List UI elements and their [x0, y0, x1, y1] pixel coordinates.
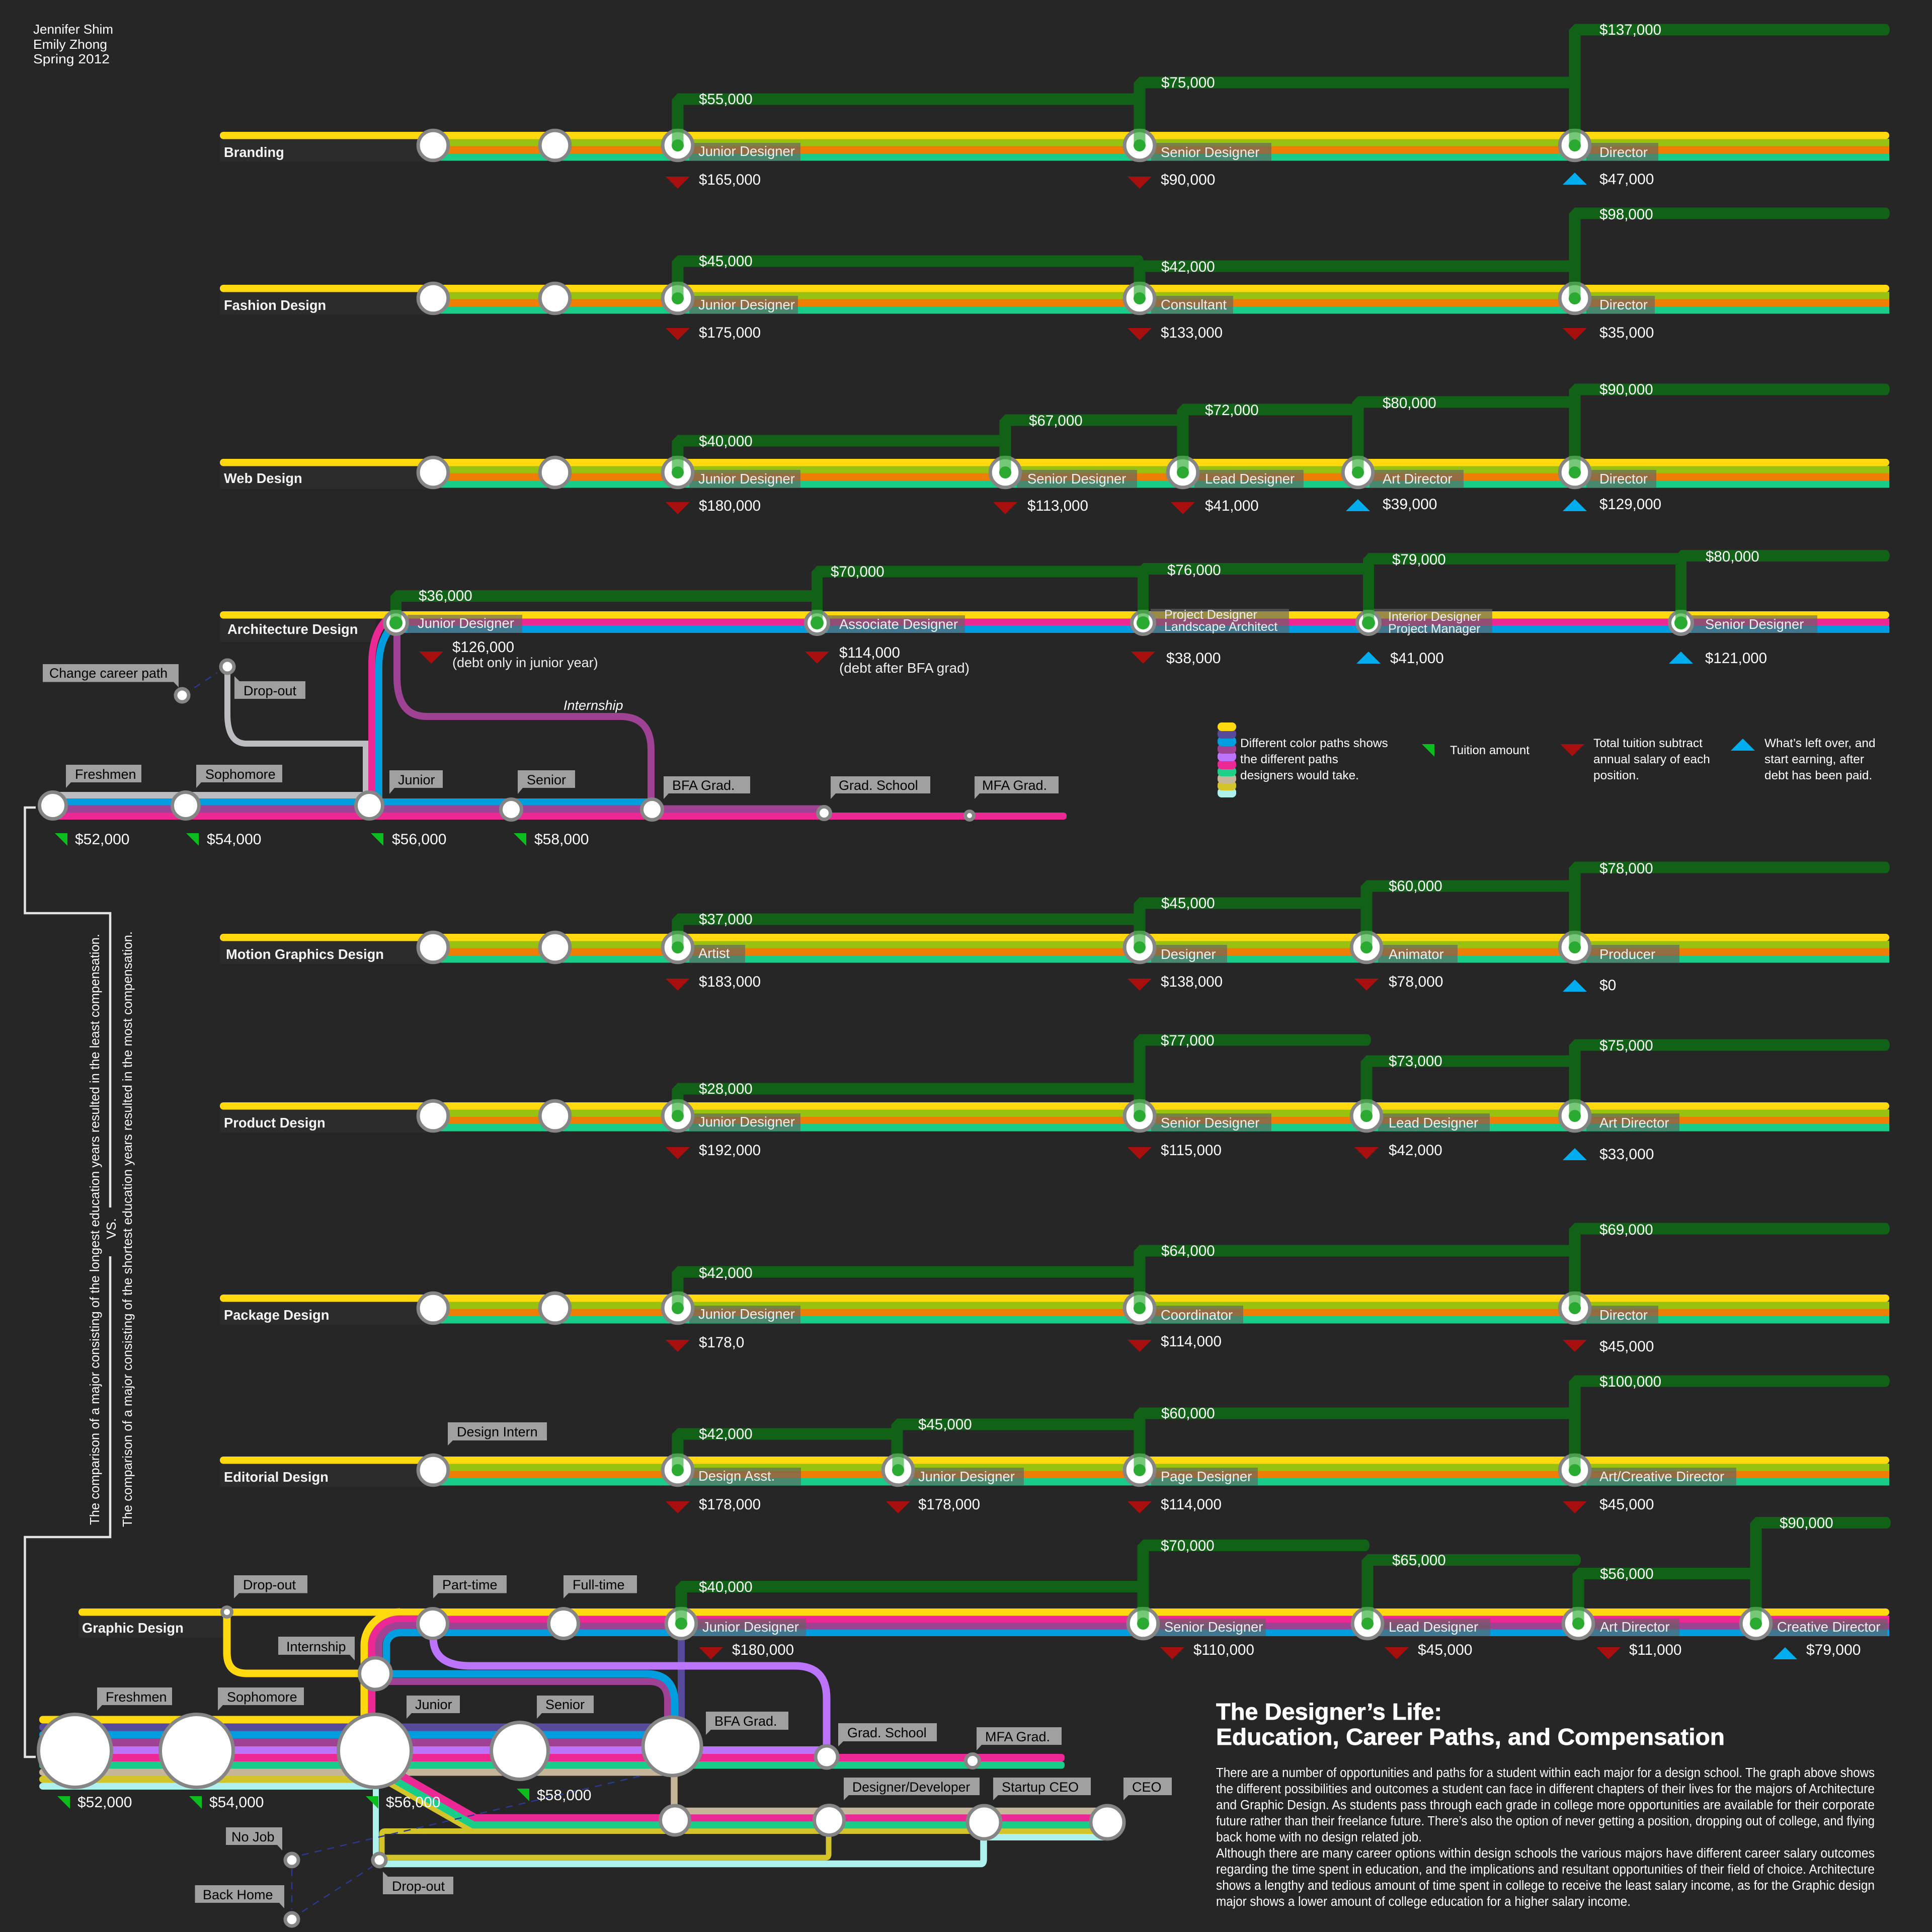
Graphic tuition amounts: $54,000 [209, 1794, 264, 1811]
Package stop: Director: $45,000 [1599, 1338, 1654, 1355]
Branding stop: Director: $137,000 [1599, 22, 1661, 38]
Architecture stop: Junior Designer: $36,000 [419, 588, 472, 604]
Editorial stop: Junior Designer [883, 1416, 1144, 1513]
Branding stop: Director: $47,000 [1599, 171, 1654, 188]
title: The Designer’s Life: [1216, 1699, 1442, 1725]
legend: total tuition: annual salary of each [1593, 753, 1710, 766]
callout: Change career path [43, 664, 179, 687]
Web stop: Art Director: Art Director [1383, 471, 1452, 487]
Graphic school tracks [39, 1716, 1065, 1790]
Product stop: Junior Designer: $28,000 [699, 1081, 753, 1097]
callout: Freshmen: Freshmen [75, 767, 136, 782]
Architecture dropout and change career nodes [176, 660, 234, 702]
Editorial tracks and name: Editorial Design [224, 1469, 329, 1485]
callout: Full-time [564, 1575, 637, 1598]
callout: Junior (Graphic): Junior [415, 1697, 452, 1712]
callout: CEO: CEO [1132, 1780, 1162, 1795]
comparison note: longest education: The comparison of a major consisting of the longest education years resulted in the least compensation. [87, 934, 102, 1525]
legend: paths text: the different paths [1240, 753, 1338, 766]
Fashion tracks and name: Fashion Design [224, 297, 326, 313]
Product tracks and name: Product Design [224, 1115, 326, 1131]
Editorial stop: Art/Creative Director [1560, 1374, 1890, 1513]
Product stop: Junior Designer: Junior Designer [698, 1114, 795, 1130]
Architecture branch lines from school to career [227, 620, 651, 810]
callout: Senior (Graphic): Senior [545, 1697, 585, 1712]
Architecture stop: Senior Designer: $80,000 [1706, 548, 1759, 565]
callout: Internship (Graphic) [278, 1637, 355, 1660]
Architecture upper tracks and name [220, 611, 1889, 642]
Architecture stop: Associate Designer [805, 564, 1147, 676]
row: Package Design [220, 1222, 1890, 1355]
Fashion stop: Junior Designer: Junior Designer [698, 297, 795, 312]
callout: Drop-out (lower): Drop-out [392, 1879, 445, 1894]
Product stop: Lead Designer: $73,000 [1389, 1053, 1442, 1070]
Product stop: Junior Designer: $192,000 [699, 1142, 761, 1159]
Product stop: Junior Designer [663, 1081, 1144, 1159]
callout: Senior [518, 770, 575, 794]
Graphic stop: Creative Director: $79,000 [1806, 1642, 1861, 1658]
callout: Sophomore: Sophomore [205, 767, 276, 782]
Graphic stop: Creative Director: $90,000 [1780, 1515, 1833, 1532]
Architecture italic note: Internship: Internship [564, 698, 623, 713]
Web stop: Art Director: $80,000 [1383, 395, 1436, 412]
Package stop: Director: Director [1599, 1307, 1648, 1323]
Fashion stop: Director [1560, 206, 1890, 341]
callout: BFA Grad.: BFA Grad. [672, 778, 735, 793]
callout: No Job [226, 1827, 282, 1850]
Graphic stop: Lead Designer: $65,000 [1392, 1552, 1446, 1569]
callout: Part-time [433, 1575, 507, 1598]
Architecture tuition amounts [55, 831, 589, 848]
Branding tracks and name [220, 130, 1889, 162]
callout: Back Home: Back Home [203, 1887, 273, 1902]
callout: MFA Grad. (Graphic) [977, 1727, 1062, 1750]
Web tracks and name [220, 457, 1889, 489]
description text: regarding the time spent in education, and the implications and resultant opportunities of their field of choice. Architecture [1216, 1863, 1875, 1877]
callout: Change career path: Change career path [49, 666, 168, 681]
Fashion stop: Junior Designer [663, 253, 1144, 341]
Branding stop: Junior Designer: $165,000 [699, 172, 761, 188]
Package tracks and name: Package Design [224, 1307, 329, 1323]
description text: and Graphic Design. As students pass through each grade in college more opportunities are available for their corporate [1216, 1798, 1875, 1812]
row: Graphic Design [38, 1515, 1891, 1926]
row: Fashion Design [220, 206, 1890, 341]
Web tracks and name: Web Design [224, 470, 302, 486]
Architecture tuition amounts: $52,000 [75, 831, 129, 848]
callout: Grad. School (Graphic): Grad. School [847, 1725, 927, 1740]
Editorial stop: Page Designer: Page Designer [1161, 1469, 1252, 1484]
callout: Internship (Graphic): Internship [286, 1639, 346, 1654]
Product stop: Lead Designer: Lead Designer [1389, 1115, 1478, 1131]
Web stop: Lead Designer: $41,000 [1205, 498, 1259, 514]
Motion stop: Artist: $183,000 [699, 974, 761, 990]
Graphic dashed links [292, 1776, 642, 1912]
Web stop: Director [1560, 381, 1890, 513]
Fashion stop: Consultant: Consultant [1161, 297, 1227, 312]
Branding stop: Junior Designer: $55,000 [699, 91, 753, 108]
Editorial stop: Art/Creative Director: Art/Creative Director [1599, 1469, 1724, 1484]
callout: Sophomore [196, 765, 282, 788]
Architecture stop: Senior Designer [1669, 548, 1890, 667]
Product stop: Senior Designer: $115,000 [1161, 1142, 1222, 1159]
Web stop: Junior Designer: $40,000 [699, 433, 753, 450]
Package stop: Coordinator [1124, 1243, 1579, 1352]
Branding stop: Director: Director [1599, 144, 1648, 160]
Product stop: Senior Designer: $77,000 [1161, 1032, 1215, 1049]
Architecture stop: Project Designer / Landscape Architect [1131, 562, 1373, 667]
Editorial stop: Page Designer [1124, 1405, 1579, 1513]
Package stop: Coordinator: Coordinator [1161, 1307, 1233, 1323]
Editorial stop: Page Designer: $114,000 [1161, 1496, 1222, 1513]
row: Web Design [220, 381, 1890, 514]
legend: total tuition: position. [1593, 769, 1639, 782]
Web stop: Lead Designer: Lead Designer [1205, 471, 1295, 487]
Architecture upper tracks and name: Architecture Design [227, 621, 358, 637]
Branding stop: Junior Designer: Junior Designer [698, 143, 795, 159]
legend: tuition: Tuition amount [1450, 744, 1530, 757]
Architecture stop: Associate Designer: Associate Designer [839, 616, 958, 632]
Graphic upper tracks [78, 1608, 1889, 1636]
Fashion stop: Director: $35,000 [1599, 325, 1654, 341]
callout: Junior [389, 770, 443, 794]
Graphic stop: Creative Director [1741, 1515, 1891, 1659]
Web stop: Junior Designer: $180,000 [699, 498, 761, 514]
Editorial stop: Junior Designer: $45,000 [918, 1416, 972, 1433]
Fashion stop: Director: Director [1599, 297, 1648, 312]
Product stop: Art Director [1560, 1037, 1890, 1163]
Web stop: Junior Designer: Junior Designer [698, 471, 795, 487]
Web stop: Senior Designer: $67,000 [1029, 413, 1083, 429]
Motion stop: Artist: Artist [698, 945, 730, 961]
Architecture school nodes [39, 792, 974, 820]
Editorial stop: Junior Designer: $178,000 [918, 1496, 980, 1513]
Web stop: Director: $129,000 [1599, 496, 1661, 513]
callout: BFA Grad. [664, 776, 750, 799]
Motion stop: Animator: Animator [1389, 946, 1444, 962]
callout: Junior (Graphic) [407, 1696, 460, 1719]
callout: BFA Grad. (Graphic): BFA Grad. [714, 1714, 777, 1729]
Web stop: Senior Designer [990, 413, 1187, 514]
row: Motion Graphics Design [220, 860, 1890, 994]
Web stop: Director: Director [1599, 471, 1648, 487]
Architecture stop: Junior Designer: (debt only in junior year) [452, 655, 598, 670]
Motion tracks and name: Motion Graphics Design [226, 946, 384, 962]
callout: Grad. School (Graphic) [838, 1723, 937, 1746]
Graphic stop: Art Director: $56,000 [1600, 1566, 1654, 1582]
Graphic nodes [38, 1607, 1124, 1926]
legend: left over [1731, 737, 1876, 782]
Motion stop: Producer: $0 [1599, 977, 1616, 994]
legend: left over: What’s left over, and [1764, 737, 1876, 750]
callout: Senior: Senior [527, 772, 566, 787]
legend: colour pills [1218, 722, 1236, 797]
callout: Sophomore (Graphic): Sophomore [227, 1689, 297, 1705]
Web stop: Junior Designer [663, 433, 1009, 514]
Graphic stop: Junior Designer [666, 1579, 1147, 1659]
Architecture stop: Junior Designer [384, 588, 821, 670]
Motion stop: Producer: $78,000 [1599, 860, 1653, 877]
description text: major shows a lower amount of college education for a higher salary income. [1216, 1895, 1631, 1909]
Graphic stop: Art Director: Art Director [1600, 1619, 1669, 1635]
Architecture stop: Associate Designer: $70,000 [831, 564, 884, 580]
Branding stop: Senior Designer [1124, 74, 1579, 189]
callout: Startup CEO [993, 1778, 1091, 1800]
comparison note: shortest education: The comparison of a major consisting of the shortest education years resulted in the most compensation. [120, 931, 135, 1527]
Architecture tuition amounts: $54,000 [207, 831, 261, 848]
Branding stop: Senior Designer: $75,000 [1161, 74, 1215, 91]
Architecture stop: Interior Designer / Project Manager: Interior Designer [1388, 610, 1481, 624]
description text: the different possibilities and outcomes a student can face in different chapters of their lives for the majors of Architecture [1216, 1782, 1875, 1796]
Architecture stop: Senior Designer: $121,000 [1705, 650, 1767, 667]
Editorial stop: Design Asst.: Design Asst. [698, 1468, 775, 1484]
Fashion stop: Consultant [1124, 259, 1579, 341]
Graphic stop: Senior Designer: $70,000 [1161, 1538, 1215, 1554]
callout: No Job: No Job [231, 1829, 275, 1844]
callout: Design Intern [448, 1422, 547, 1445]
Architecture stop: Interior Designer / Project Manager: Project Manager [1388, 622, 1480, 636]
Graphic branch lines [227, 1612, 827, 1757]
Architecture tuition amounts: $56,000 [392, 831, 446, 848]
Graphic stop: Art Director: $11,000 [1629, 1642, 1681, 1658]
Graphic stop: Junior Designer: Junior Designer [702, 1619, 799, 1635]
Motion stop: Designer: $45,000 [1161, 895, 1215, 912]
Graphic stop: Lead Designer: Lead Designer [1389, 1619, 1478, 1635]
comparison note: VS.: VS. [104, 1218, 119, 1239]
Fashion stop: Consultant: $133,000 [1161, 325, 1223, 341]
Motion tracks and name [220, 932, 1889, 964]
callout: Freshmen (Graphic): Freshmen [106, 1689, 167, 1705]
legend: paths text: Different color paths shows [1240, 737, 1388, 750]
Architecture stop: Associate Designer: (debt after BFA grad) [839, 660, 970, 676]
row: Product Design [220, 1032, 1890, 1163]
callout: Junior: Junior [398, 772, 435, 787]
title: Education, Career Paths, and Compensation [1216, 1724, 1725, 1750]
Architecture stop: Project Designer / Landscape Architect: Landscape Architect [1164, 620, 1277, 634]
legend [1218, 722, 1876, 797]
Motion stop: Designer [1124, 895, 1371, 991]
Editorial stop: Art/Creative Director: $45,000 [1599, 1496, 1654, 1513]
Editorial stop: Design Asst.: $42,000 [699, 1426, 753, 1442]
Package stop: Junior Designer: Junior Designer [698, 1306, 795, 1322]
Package stop: Junior Designer [663, 1265, 1144, 1352]
callout: Drop-out (lower) [383, 1872, 453, 1894]
Motion stop: Producer [1560, 860, 1890, 994]
Graphic stop: Senior Designer: Senior Designer [1164, 1619, 1263, 1635]
Product stop: Art Director: Art Director [1599, 1115, 1669, 1131]
Product stop: Lead Designer: $42,000 [1389, 1142, 1442, 1159]
legend: total tuition: Total tuition subtract [1593, 737, 1703, 750]
Editorial stop: Design Asst. [663, 1426, 901, 1513]
callout: Drop-out [234, 676, 305, 699]
Graphic tuition amounts [57, 1787, 591, 1811]
callout: Designer/Developer: Designer/Developer [852, 1780, 970, 1795]
description text: future rather than their freelance future. There’s also the option of never getting a position, dropping out of college, and flying [1216, 1814, 1875, 1828]
Branding stop: Director [1560, 22, 1890, 188]
Architecture stop: Project Designer / Landscape Architect: Project Designer [1164, 608, 1257, 622]
Web stop: Director: $90,000 [1599, 381, 1653, 398]
Branding stop: Senior Designer: $90,000 [1161, 172, 1215, 188]
callout: Drop-out (Graphic) [234, 1575, 307, 1598]
callout: Freshmen [66, 765, 141, 788]
Architecture stop: Project Designer / Landscape Architect: $76,000 [1167, 562, 1221, 579]
legend: paths text: designers would take. [1240, 769, 1359, 782]
Editorial stop: Junior Designer: Junior Designer [918, 1469, 1015, 1484]
Graphic stop: Art Director [1563, 1566, 1760, 1659]
row: Branding [220, 22, 1890, 189]
Product stop: Senior Designer: Senior Designer [1161, 1115, 1259, 1131]
legend: total tuition [1560, 737, 1710, 782]
callout: BFA Grad. (Graphic) [706, 1712, 788, 1735]
Editorial tracks and name [220, 1455, 1889, 1487]
Graphic stop: Lead Designer [1352, 1552, 1581, 1659]
Package stop: Coordinator: $64,000 [1161, 1243, 1215, 1259]
Graphic stop: Junior Designer: $40,000 [699, 1579, 753, 1595]
credits: Emily Zhong [33, 37, 107, 52]
Architecture stop: Senior Designer: Senior Designer [1705, 616, 1804, 632]
Web stop: Lead Designer: $72,000 [1205, 402, 1259, 419]
Architecture stop: Junior Designer: Junior Designer [418, 615, 514, 631]
Motion stop: Designer: $138,000 [1161, 974, 1223, 990]
Graphic post-college lines [375, 1765, 1107, 1864]
Graphic stop: Creative Director: Creative Director [1777, 1619, 1880, 1635]
Package stop: Director: $69,000 [1599, 1222, 1653, 1238]
callout: Drop-out: Drop-out [244, 683, 297, 698]
Fashion stop: Consultant: $42,000 [1161, 259, 1215, 275]
callout: Senior (Graphic) [537, 1696, 594, 1719]
Graphic stop: Senior Designer: $110,000 [1193, 1642, 1254, 1658]
row: Editorial Design [220, 1374, 1890, 1513]
Graphic tuition amounts: $56,000 [386, 1794, 440, 1811]
Web stop: Lead Designer [1168, 402, 1362, 514]
Package stop: Director [1560, 1222, 1890, 1355]
legend: left over: start earning, after [1764, 753, 1864, 766]
Architecture stop: Interior Designer / Project Manager [1356, 551, 1685, 667]
callout: Drop-out (Graphic): Drop-out [243, 1577, 296, 1592]
Graphic name [78, 1616, 224, 1638]
credits [33, 22, 113, 66]
row: Architecture Design [39, 548, 1890, 848]
description text [1216, 1766, 1875, 1909]
Fashion stop: Junior Designer: $45,000 [699, 253, 753, 270]
Product stop: Lead Designer [1351, 1053, 1579, 1159]
credits: Spring 2012 [33, 51, 110, 66]
description text: back home with no design related job. [1216, 1830, 1422, 1844]
Package stop: Junior Designer: $42,000 [699, 1265, 753, 1281]
Web stop: Art Director [1343, 395, 1579, 513]
Architecture stop: Junior Designer: $126,000 [452, 639, 514, 656]
callout: MFA Grad. [975, 776, 1059, 799]
Motion stop: Animator [1351, 878, 1579, 991]
callout: Part-time: Part-time [442, 1577, 498, 1592]
Graphic tuition amounts: $58,000 [537, 1787, 591, 1804]
Motion stop: Artist [663, 911, 1144, 991]
callout: Sophomore (Graphic) [218, 1687, 304, 1711]
comparison bracket [25, 808, 110, 1757]
callout: Startup CEO: Startup CEO [1002, 1780, 1079, 1795]
Branding stop: Senior Designer: Senior Designer [1161, 144, 1259, 160]
callout: Grad. School: Grad. School [839, 778, 918, 793]
Web stop: Senior Designer: $113,000 [1027, 498, 1088, 514]
Editorial stop: Art/Creative Director: $100,000 [1599, 1374, 1661, 1390]
Graphic stop: Senior Designer [1128, 1538, 1370, 1659]
Motion stop: Animator: $78,000 [1389, 974, 1443, 990]
Architecture stop: Interior Designer / Project Manager: $41,000 [1390, 650, 1444, 667]
callout: MFA Grad.: MFA Grad. [982, 778, 1047, 793]
Architecture stop: Project Designer / Landscape Architect: $38,000 [1166, 650, 1221, 667]
callout: Designer/Developer [844, 1778, 980, 1800]
Graphic stop: Junior Designer: $180,000 [732, 1642, 794, 1658]
Product stop: Senior Designer [1124, 1032, 1371, 1159]
Graphic tuition amounts: $52,000 [77, 1794, 132, 1811]
callout: Freshmen (Graphic) [97, 1687, 172, 1711]
Motion stop: Designer: Designer [1161, 946, 1216, 962]
Web stop: Senior Designer: Senior Designer [1027, 471, 1126, 487]
Graphic name: Graphic Design [82, 1620, 184, 1636]
Editorial stop: Page Designer: $60,000 [1161, 1405, 1215, 1422]
callout: Design Intern: Design Intern [457, 1424, 538, 1439]
Branding tracks and name: Branding [224, 144, 284, 160]
Motion stop: Producer: Producer [1599, 946, 1655, 962]
Package stop: Junior Designer: $178,0 [699, 1334, 744, 1351]
callout: Full-time: Full-time [573, 1577, 625, 1592]
Graphic stop: Lead Designer: $45,000 [1418, 1642, 1472, 1658]
Product stop: Art Director: $33,000 [1599, 1146, 1654, 1163]
description text: Although there are many career options within design schools the various majors have different career salary outcomes [1216, 1846, 1875, 1861]
Package stop: Coordinator: $114,000 [1161, 1333, 1222, 1350]
legend: paths text [1240, 737, 1388, 782]
callout: Grad. School [831, 776, 930, 799]
Product stop: Art Director: $75,000 [1599, 1037, 1653, 1054]
Product tracks and name [220, 1101, 1889, 1133]
Fashion stop: Junior Designer: $175,000 [699, 325, 761, 341]
Fashion stop: Director: $98,000 [1599, 206, 1653, 223]
Architecture stop: Associate Designer: $114,000 [839, 645, 900, 661]
title [1216, 1699, 1725, 1750]
Web stop: Art Director: $39,000 [1383, 496, 1437, 513]
Architecture tuition amounts: $58,000 [534, 831, 589, 848]
legend: left over: debt has been paid. [1764, 769, 1872, 782]
Branding stop: Junior Designer [663, 91, 1144, 189]
Package tracks and name [220, 1293, 1889, 1325]
callout: MFA Grad. (Graphic): MFA Grad. [985, 1729, 1050, 1744]
callout: CEO [1123, 1778, 1172, 1800]
Motion stop: Animator: $60,000 [1389, 878, 1442, 895]
credits: Jennifer Shim [33, 22, 113, 37]
Motion stop: Artist: $37,000 [699, 911, 753, 928]
Architecture lower school tracks [53, 792, 1067, 820]
Architecture stop: Interior Designer / Project Manager: $79,000 [1392, 551, 1446, 568]
callout: Back Home [195, 1885, 284, 1908]
description text: shows a lengthy and tedious amount of time spent in college to receive the least salary income, as for the Graphic design [1216, 1879, 1875, 1893]
Fashion tracks and name [220, 283, 1889, 315]
description text: There are a number of opportunities and paths for a student within each major for a design school. The graph above shows [1216, 1766, 1875, 1780]
Editorial stop: Design Asst.: $178,000 [699, 1496, 761, 1513]
